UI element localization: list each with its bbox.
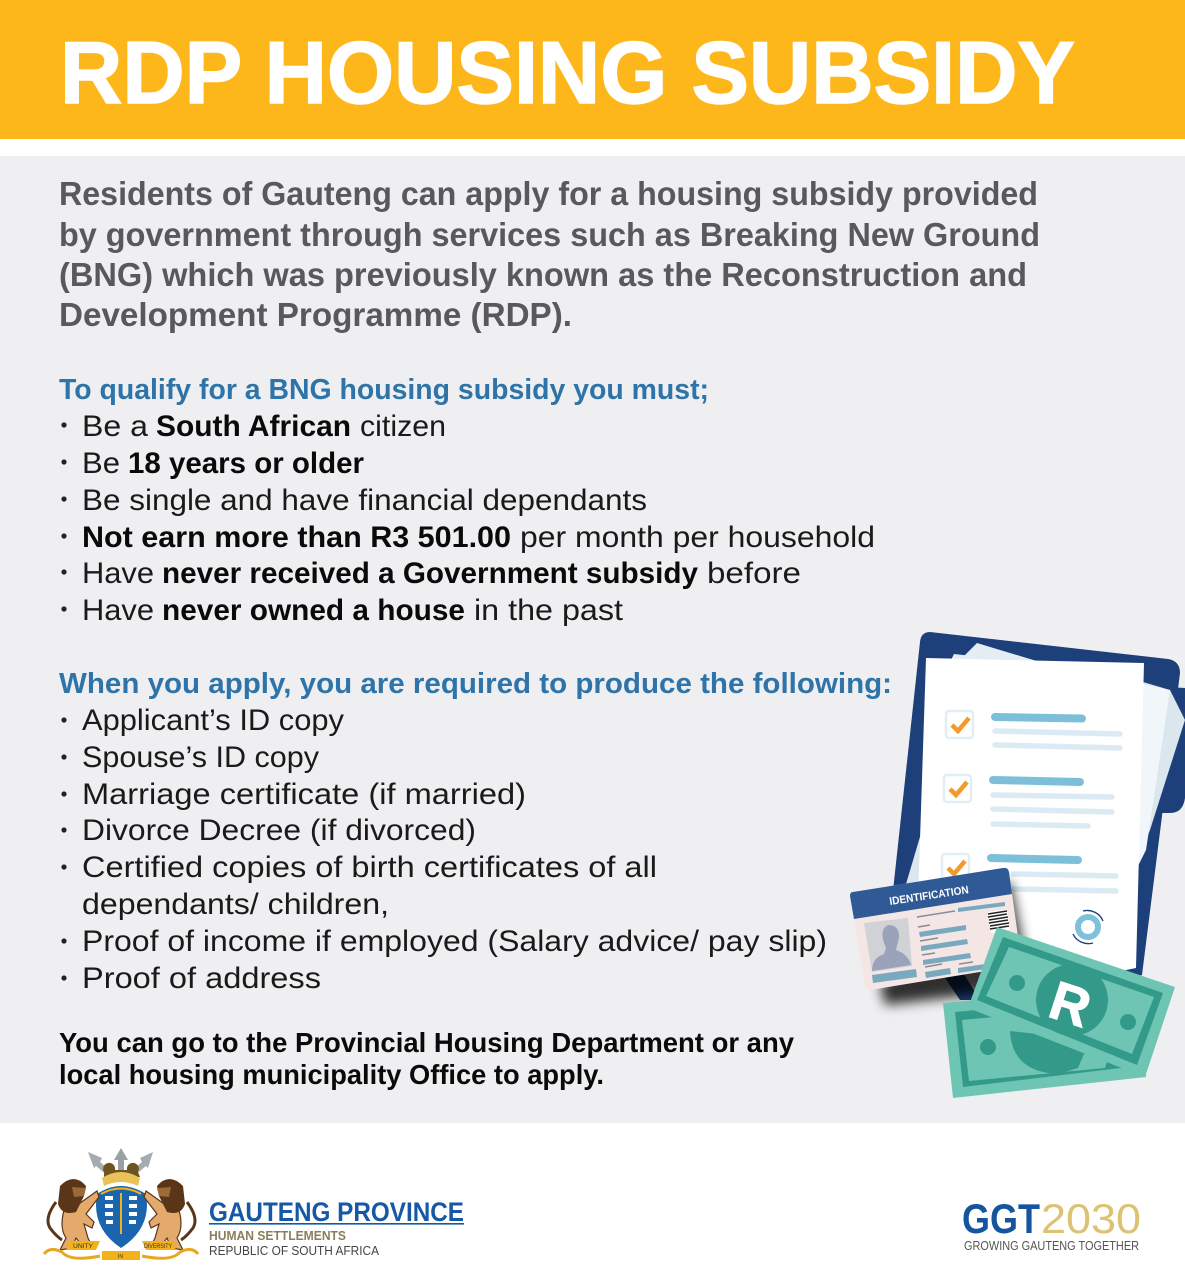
stamp (1078, 917, 1098, 937)
qualification list: 18 years or older (128, 447, 365, 480)
motto scroll: UNITY (73, 1244, 93, 1250)
shield (96, 1186, 147, 1248)
spears (114, 1148, 128, 1176)
qualification list: Be a (82, 410, 149, 443)
qualification list (61, 410, 875, 627)
intro paragraph (59, 175, 1040, 333)
qualification list: Not earn more than R3 501.00 (82, 521, 511, 554)
left lion (48, 1179, 99, 1250)
motto scroll (44, 1241, 198, 1260)
qualification list: per month per household (520, 521, 875, 554)
logo: GGT2030 (962, 1195, 1141, 1253)
motto scroll: IN (118, 1254, 123, 1260)
qualification list: citizen (360, 410, 446, 443)
required documents list: Applicant’s ID copy (82, 704, 344, 737)
closing note (59, 1027, 795, 1090)
back banknote (943, 985, 1146, 1098)
right lion (144, 1179, 195, 1250)
heading: qualification: To qualify for a BNG housing subsidy you must; (59, 374, 709, 406)
logo text: Gauteng Province: REPUBLIC OF SOUTH AFRICA (209, 1244, 380, 1258)
front banknote: R (1042, 970, 1098, 1039)
logo text: Gauteng Province: HUMAN SETTLEMENTS (209, 1229, 346, 1243)
closing note: You can go to the Provincial Housing Department or any (59, 1027, 795, 1058)
qualification list: never owned a house (162, 594, 465, 627)
intro paragraph: Development Programme (RDP). (59, 296, 572, 333)
logo: GGT2030: GROWING GAUTENG TOGETHER (964, 1239, 1139, 1253)
crown (103, 1163, 140, 1177)
logo: GGT2030: GGT (962, 1195, 1040, 1242)
qualification list: Be (82, 447, 120, 480)
logo text: Gauteng Province: GAUTENG PROVINCE (209, 1197, 464, 1227)
logo: Gauteng coat of arms (44, 1148, 198, 1260)
title banner (0, 0, 1185, 139)
required documents list (61, 704, 827, 995)
required documents list: Marriage certificate (if married) (82, 778, 526, 811)
required documents list: Proof of income if employed (Salary advice/ pay slip) (82, 925, 827, 958)
illustration: clipboard, ID card and money (850, 632, 1185, 1098)
qualification list: Have (82, 594, 154, 627)
qualification list: in the past (474, 594, 623, 627)
required documents list: Certified copies of birth certificates of all (82, 851, 657, 884)
heading: required documents: When you apply, you are required to produce the following: (59, 668, 892, 700)
required documents list: Spouse’s ID copy (82, 741, 319, 774)
checklist page (918, 658, 1144, 1000)
motto scroll: DIVERSITY (144, 1244, 172, 1250)
card shadow (880, 880, 1026, 1005)
qualification list: Have (82, 557, 154, 590)
clipboard (892, 632, 1185, 1000)
required documents list: dependants/ children, (82, 888, 389, 921)
logo text: Gauteng Province (209, 1197, 464, 1258)
required documents list: Proof of address (82, 962, 321, 995)
qualification list: before (707, 557, 801, 590)
required documents list: Divorce Decree (if divorced) (82, 814, 476, 847)
title banner: RDP HOUSING SUBSIDY (60, 23, 1075, 122)
front banknote (968, 927, 1175, 1077)
qualification list: Be single and have financial dependants (82, 484, 647, 517)
intro paragraph: by government through services such as Breaking New Ground (59, 216, 1040, 253)
ID card (850, 868, 1022, 990)
intro paragraph: Residents of Gauteng can apply for a housing subsidy provided (59, 175, 1038, 212)
logo: GGT2030: 2030 (1041, 1195, 1141, 1242)
ID card: IDENTIFICATION (889, 884, 970, 908)
page background panel (0, 156, 1185, 1123)
qualification list: never received a Government subsidy (162, 557, 699, 590)
closing note: local housing municipality Office to apply. (59, 1059, 604, 1090)
intro paragraph: (BNG) which was previously known as the Reconstruction and (59, 256, 1027, 293)
qualification list: South African (156, 410, 351, 443)
